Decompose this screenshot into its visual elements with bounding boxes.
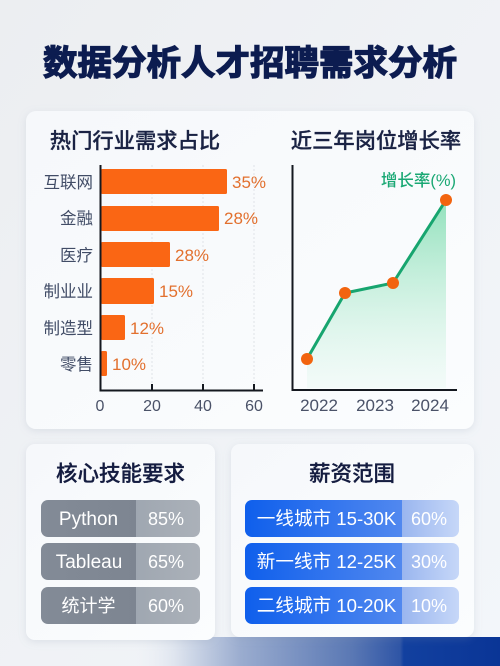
bar: 互联网 (44, 169, 266, 194)
bar chart axes: 40 (194, 398, 212, 415)
skill: Python: Python (59, 509, 118, 530)
skill: 统计学: 统计学 (62, 596, 116, 616)
bar: 零售 (60, 351, 146, 376)
panel: salary range (231, 444, 474, 637)
bar: 零售: 零售 (60, 355, 93, 374)
bar: 医疗 (60, 242, 209, 267)
series label: 增长率(%) (381, 171, 456, 190)
salary: 一线城市 (245, 500, 459, 537)
bar: 金融: 28% (224, 209, 258, 228)
growth line (307, 200, 446, 359)
bar: 制业业: 制业业 (44, 282, 93, 301)
bar chart axes: 0 (96, 398, 105, 415)
salary: 二线城市 (245, 587, 459, 624)
bottom gradient band (130, 637, 500, 666)
skill: Tableau: Tableau (56, 552, 122, 573)
line chart: job growth (292, 165, 457, 415)
bar chart axes: 20 (143, 398, 161, 415)
line chart axes (292, 165, 457, 415)
panel: top charts (26, 111, 474, 429)
skill: Python (41, 500, 200, 537)
bar: 互联网: 互联网 (44, 173, 93, 192)
salary: 新一线市: 新一线市 12-25K (257, 551, 397, 572)
bar: 医疗: 医疗 (60, 246, 93, 265)
skill: 统计学 (41, 587, 200, 624)
bar: 制造型 (44, 315, 164, 340)
title: 数据分析人才招聘需求分析 (43, 45, 457, 83)
salary: 新一线市: 30% (411, 552, 447, 572)
bar: 金融 (60, 206, 258, 231)
bar: 制业业: 15% (159, 282, 193, 301)
bar chart axes: 60 (245, 398, 263, 415)
heading: industry demand share: 热门行业需求占比 (50, 129, 220, 153)
heading: salary range: 薪资范围 (309, 462, 395, 486)
bar: 制造型: 制造型 (44, 319, 93, 338)
skill: Python: 85% (148, 509, 184, 529)
heading: three-year growth: 近三年岗位增长率 (291, 129, 461, 153)
bar chart axes (96, 165, 263, 415)
bar: 制业业 (44, 278, 193, 304)
bar: 金融: 金融 (60, 209, 93, 228)
bar: 互联网: 35% (232, 173, 266, 192)
line chart axes: 2024 (411, 396, 449, 415)
bar: 零售: 10% (112, 355, 146, 374)
bar chart: industry demand (44, 165, 266, 415)
salary: 一线城市: 60% (411, 509, 447, 529)
data points (301, 194, 452, 365)
salary: 新一线市 (245, 543, 459, 580)
skill: Tableau (41, 543, 200, 580)
area under line (307, 200, 446, 388)
skill: Tableau: 65% (148, 552, 184, 572)
bar: 医疗: 28% (175, 246, 209, 265)
line chart axes: 2022 (300, 396, 338, 415)
line chart axes: 2023 (356, 396, 394, 415)
skill: 统计学: 60% (148, 596, 184, 616)
salary: 二线城市: 10% (411, 596, 447, 616)
bar: 制造型: 12% (130, 319, 164, 338)
heading: core skills: 核心技能要求 (56, 462, 185, 486)
panel: core skills (26, 444, 215, 640)
salary: 一线城市: 一线城市 15-30K (257, 508, 397, 529)
salary: 二线城市: 二线城市 10-20K (257, 595, 397, 616)
